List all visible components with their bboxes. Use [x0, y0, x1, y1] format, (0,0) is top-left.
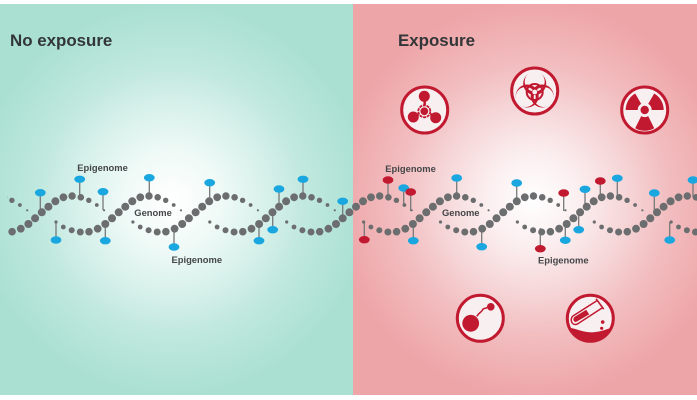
icon: bomb: [457, 295, 503, 341]
panel: exposure background: [353, 4, 697, 395]
left labels: [77, 162, 222, 265]
icon: test tube: [567, 295, 613, 342]
title: exposure: Exposure: [398, 31, 475, 50]
label: genome left: Genome: [134, 207, 172, 218]
epigenome pins: blue markers: [35, 174, 697, 251]
label: epigenome bottom left: Epigenome: [172, 254, 222, 265]
icon: biohazard: [512, 68, 558, 114]
label: epigenome top left: Epigenome: [77, 162, 128, 173]
title: no exposure: No exposure: [10, 31, 112, 50]
icon: radiation: [622, 87, 668, 133]
panel: no exposure background: [0, 4, 353, 395]
epigenome pins: red markers: [359, 176, 606, 252]
icon: chemical weapon: [402, 87, 448, 133]
dna double helix: [0, 192, 697, 236]
label: genome right: Genome: [442, 207, 480, 218]
label: epigenome top right: Epigenome: [385, 163, 436, 174]
right labels: [385, 163, 589, 266]
label: epigenome bottom right: Epigenome: [538, 254, 589, 266]
